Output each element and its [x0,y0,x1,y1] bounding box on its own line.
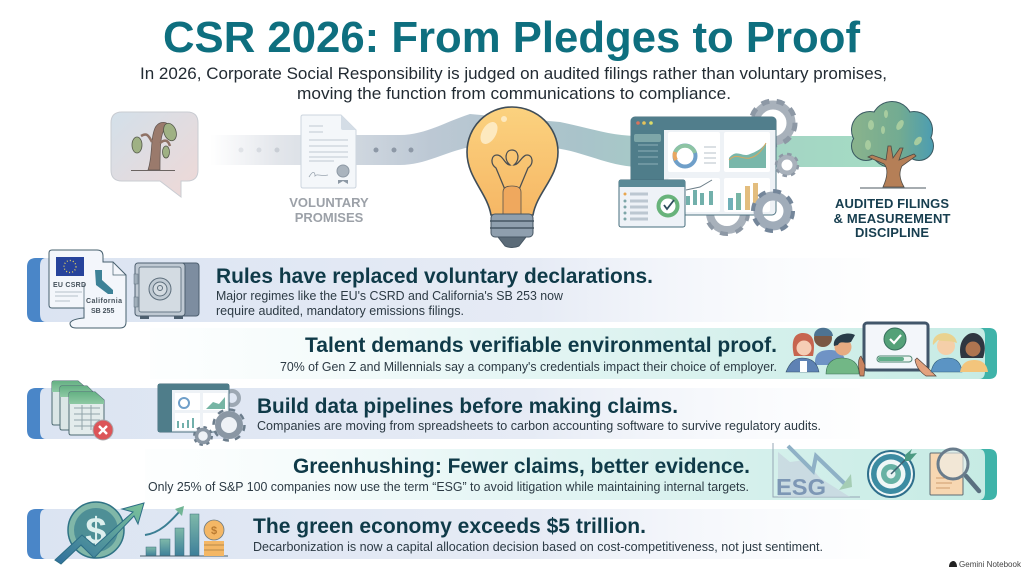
icon: document with magnifier [930,449,979,495]
heading: Build data pipelines before making claims. [257,395,678,418]
heading: The green economy exceeds $5 trillion. [253,515,646,538]
icon: voluntary promise document [301,115,356,188]
icon: dollar coin with rising arrow: $ [85,511,107,553]
icon: regulation documents: EU CSRD [53,282,86,289]
watermark: Gemini Notebook: Gemini Notebook [959,559,1022,569]
label: audited filings and measurement discipline [834,196,951,240]
body text: Decarbonization is now a capital allocation decision based on cost-competitiveness, not just sentiment. [253,540,823,554]
panel: rules have replaced voluntary declarations [27,250,870,328]
panel: the green economy exceeds $5 trillion [27,502,870,564]
heading: Rules have replaced voluntary declarations. [216,265,653,288]
heading: Talent demands verifiable environmental proof. [305,334,777,357]
icon: wilting plant speech bubble [111,112,198,197]
subtitle: moving the function from communications to compliance. [297,85,731,103]
icon: bar chart with coins: $ [211,525,217,537]
label: audited filings and measurement discipline: & MEASUREMENT [834,211,951,226]
icon: dashboard with gears [619,101,798,234]
icon: regulation documents: California [86,298,122,305]
icon: bar chart with coins [140,506,228,556]
label: audited filings and measurement discipline: AUDITED FILINGS [835,196,949,211]
body text: Only 25% of S&P 100 companies now use the term “ESG” to avoid litigation while maintaining internal targets. [148,480,749,494]
body text: require audited, mandatory emissions filings. [216,304,464,318]
body text: 70% of Gen Z and Millennials say a company's credentials impact their choice of employer. [280,360,777,374]
body text: Companies are moving from spreadsheets to carbon accounting software to survive regulatory audits. [257,419,821,433]
icon: healthy tree [852,102,933,188]
icon: regulation documents [49,250,126,328]
heading: Greenhushing: Fewer claims, better evidence. [293,455,750,478]
label: voluntary promises: PROMISES [295,210,364,225]
icon: spreadsheets with error mark [52,381,113,440]
icon: light bulb [467,107,558,248]
icon: target with arrow [868,449,917,497]
icon: safe [134,263,199,319]
panel: greenhushing [145,443,997,500]
body text [216,289,564,318]
icon: dashboard with gears [158,384,244,445]
icon: declining ESG chart: ESG [776,474,826,500]
icon: regulation documents: SB 255 [91,308,114,315]
label: audited filings and measurement discipline: DISCIPLINE [855,225,929,240]
title: CSR 2026: From Pledges to Proof [163,13,860,62]
subtitle: In 2026, Corporate Social Responsibility is judged on audited filings rather than voluntary promises, [140,65,887,83]
ribbon dots [238,148,414,152]
panel: talent demands verifiable environmental proof [150,323,997,379]
body text: Major regimes like the EU's CSRD and California's SB 253 now [216,289,564,303]
label: voluntary promises [289,195,369,225]
icon: people with tablet [786,323,988,376]
icon: dollar coin with rising arrow [55,502,144,564]
panel: build data pipelines before making claims [27,381,860,445]
label: voluntary promises: VOLUNTARY [289,195,369,210]
transition ribbon [210,114,885,167]
icon: declining ESG chart [773,443,860,500]
subtitle [140,65,887,103]
